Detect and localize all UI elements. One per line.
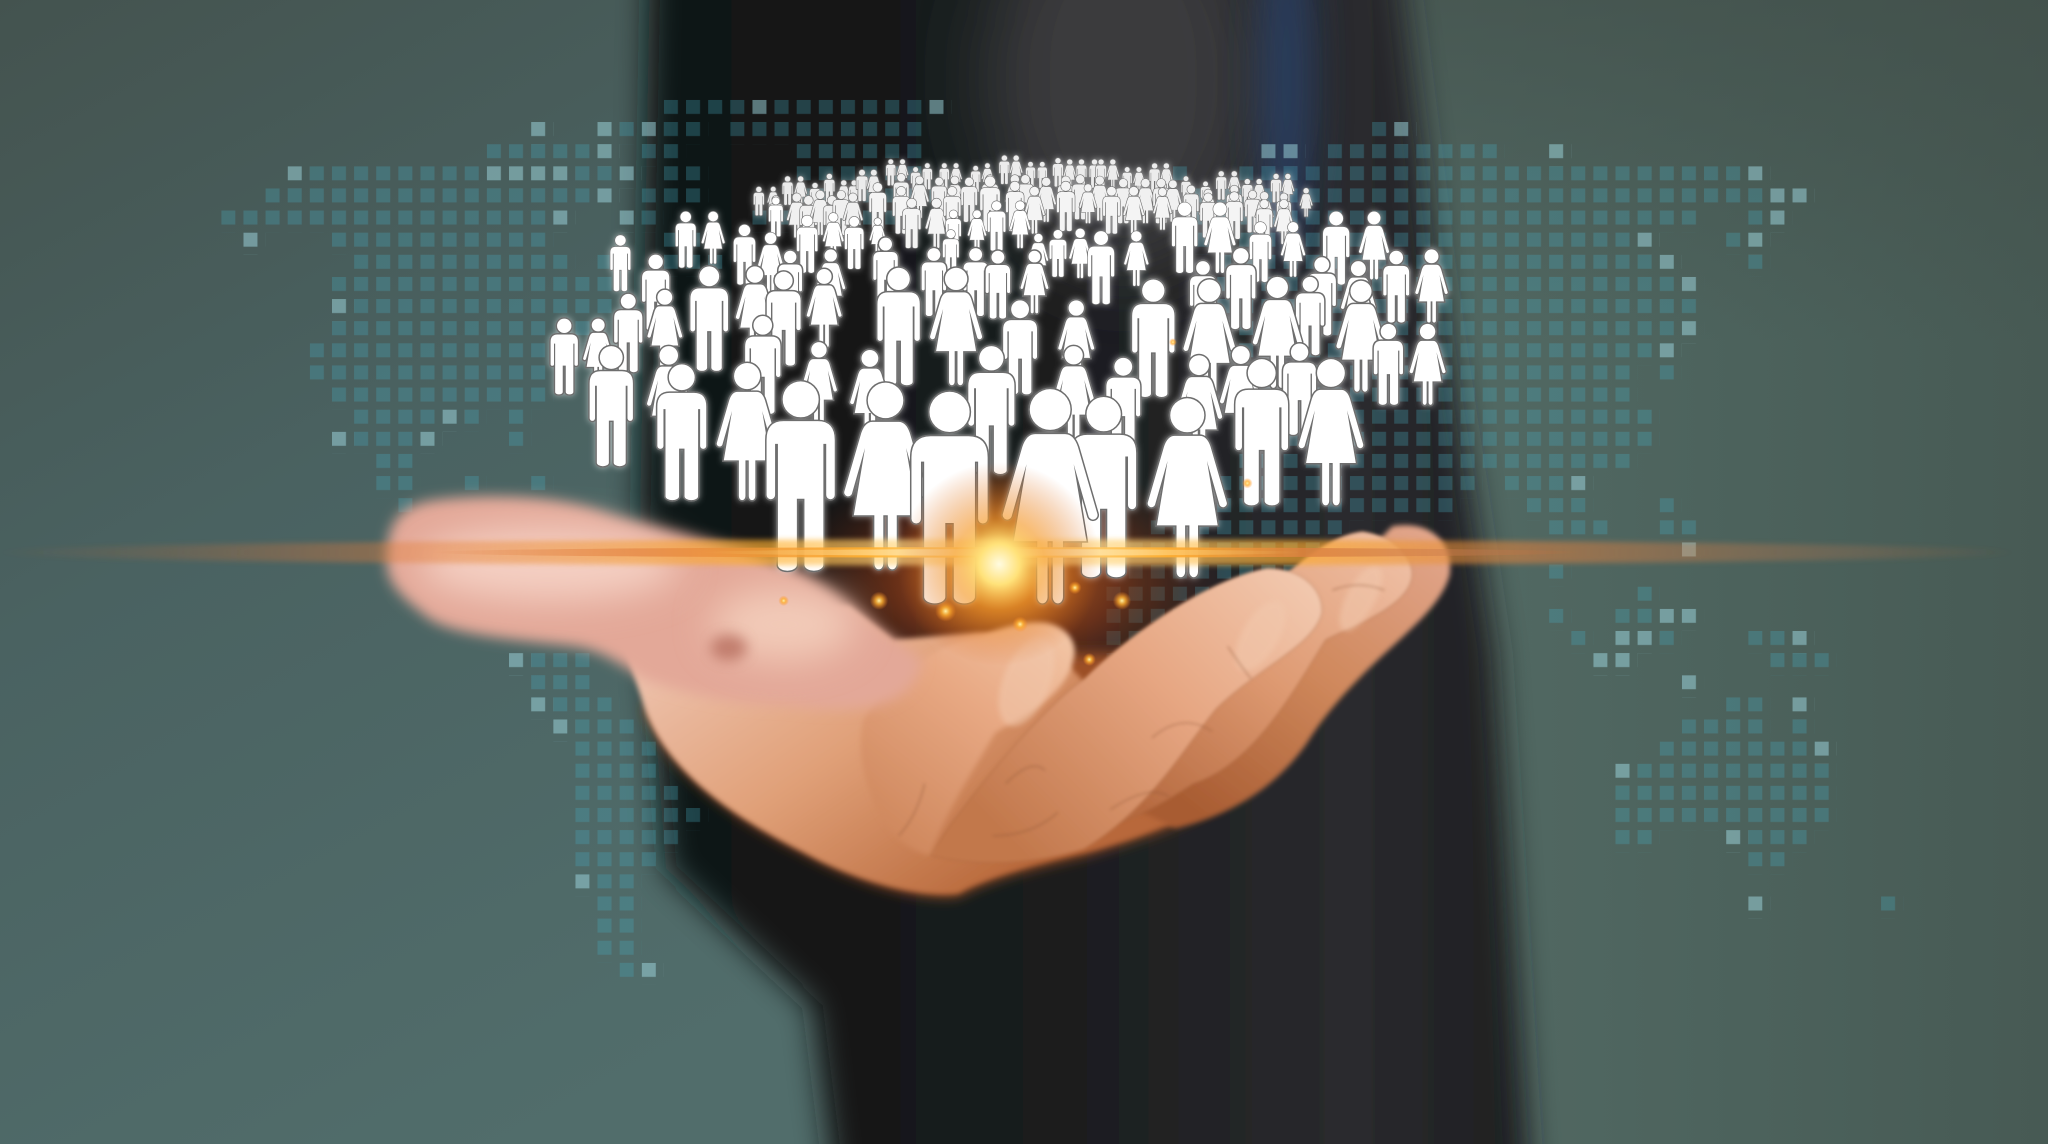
hand: skin creases <box>899 585 1384 836</box>
second row of small people <box>769 174 1291 243</box>
map: lighter accent squares <box>243 100 1837 985</box>
flare: bright core <box>431 547 1580 558</box>
golden sparks <box>778 338 1253 666</box>
flare: soft wide band <box>0 539 2018 565</box>
hand: palm base <box>614 606 1384 894</box>
ember glow behind hand <box>784 457 1228 705</box>
background: blurred teal wall, left side <box>0 0 1045 1144</box>
third row of people <box>869 176 1294 248</box>
background: blurred teal wall, right side <box>1045 0 2048 1144</box>
pale highlights <box>418 528 679 601</box>
hand: finger nails <box>987 559 1391 734</box>
skin crease shadow <box>711 635 747 661</box>
middle rows of people <box>551 238 1448 474</box>
blurred dark suit of the person <box>640 0 1531 1144</box>
ring finger <box>1110 532 1412 823</box>
middle finger <box>930 568 1322 863</box>
flare: white-hot centre line <box>703 549 1304 556</box>
map: teal squares for the continents <box>221 100 1903 985</box>
hand: orange rim shadow <box>644 653 1358 897</box>
finger silhouette <box>387 496 922 709</box>
front rows of large people <box>590 346 1363 603</box>
background: darker top of right wall <box>1045 0 2048 1144</box>
little finger <box>1136 525 1450 828</box>
blue tie <box>1258 0 1315 261</box>
dotted world map <box>221 100 1903 985</box>
suit lighter chest <box>986 0 1260 274</box>
suit body <box>640 0 1531 1144</box>
crowd of white people icons <box>551 155 1448 603</box>
hand: blurred foreground finger at left <box>387 496 922 709</box>
central light burst <box>897 462 1101 666</box>
thumb <box>861 622 1075 855</box>
back row of tiny people <box>754 155 1312 217</box>
orange lens flare line <box>0 539 2018 565</box>
hand: fingers <box>861 525 1450 863</box>
fourth row of people <box>610 197 1389 304</box>
